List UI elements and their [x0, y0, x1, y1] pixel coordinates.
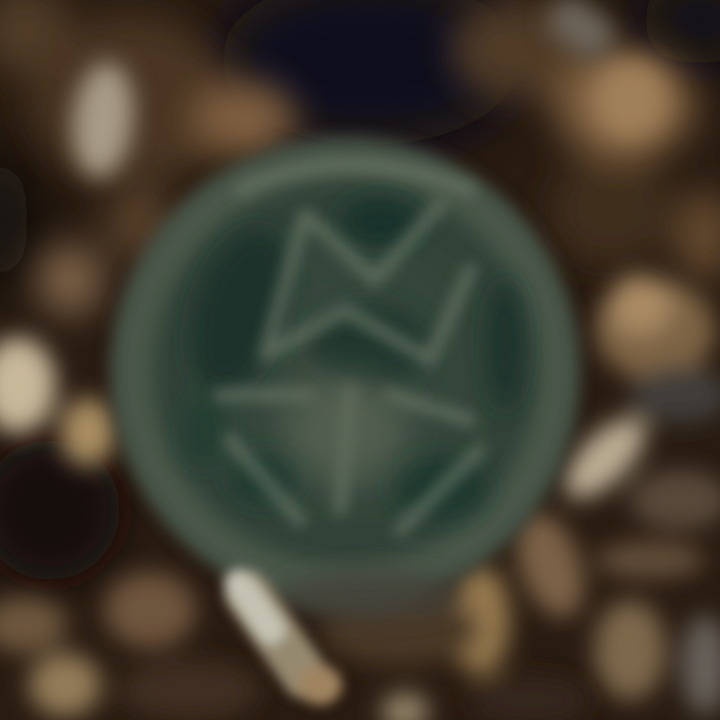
right-side capsules — [503, 275, 720, 715]
bright capsule top left — [67, 0, 668, 181]
dark backdrop at top — [0, 0, 720, 290]
foreground white capsule — [216, 562, 342, 708]
coin — [110, 137, 580, 619]
bottom capsules — [0, 565, 590, 720]
left-side capsules — [0, 337, 116, 466]
coin lower rim shadow — [280, 571, 460, 619]
coin dark inner field — [172, 198, 523, 518]
coin emblem lines — [220, 165, 480, 530]
coin disc — [110, 137, 580, 607]
coin muted centre highlight — [285, 375, 405, 485]
